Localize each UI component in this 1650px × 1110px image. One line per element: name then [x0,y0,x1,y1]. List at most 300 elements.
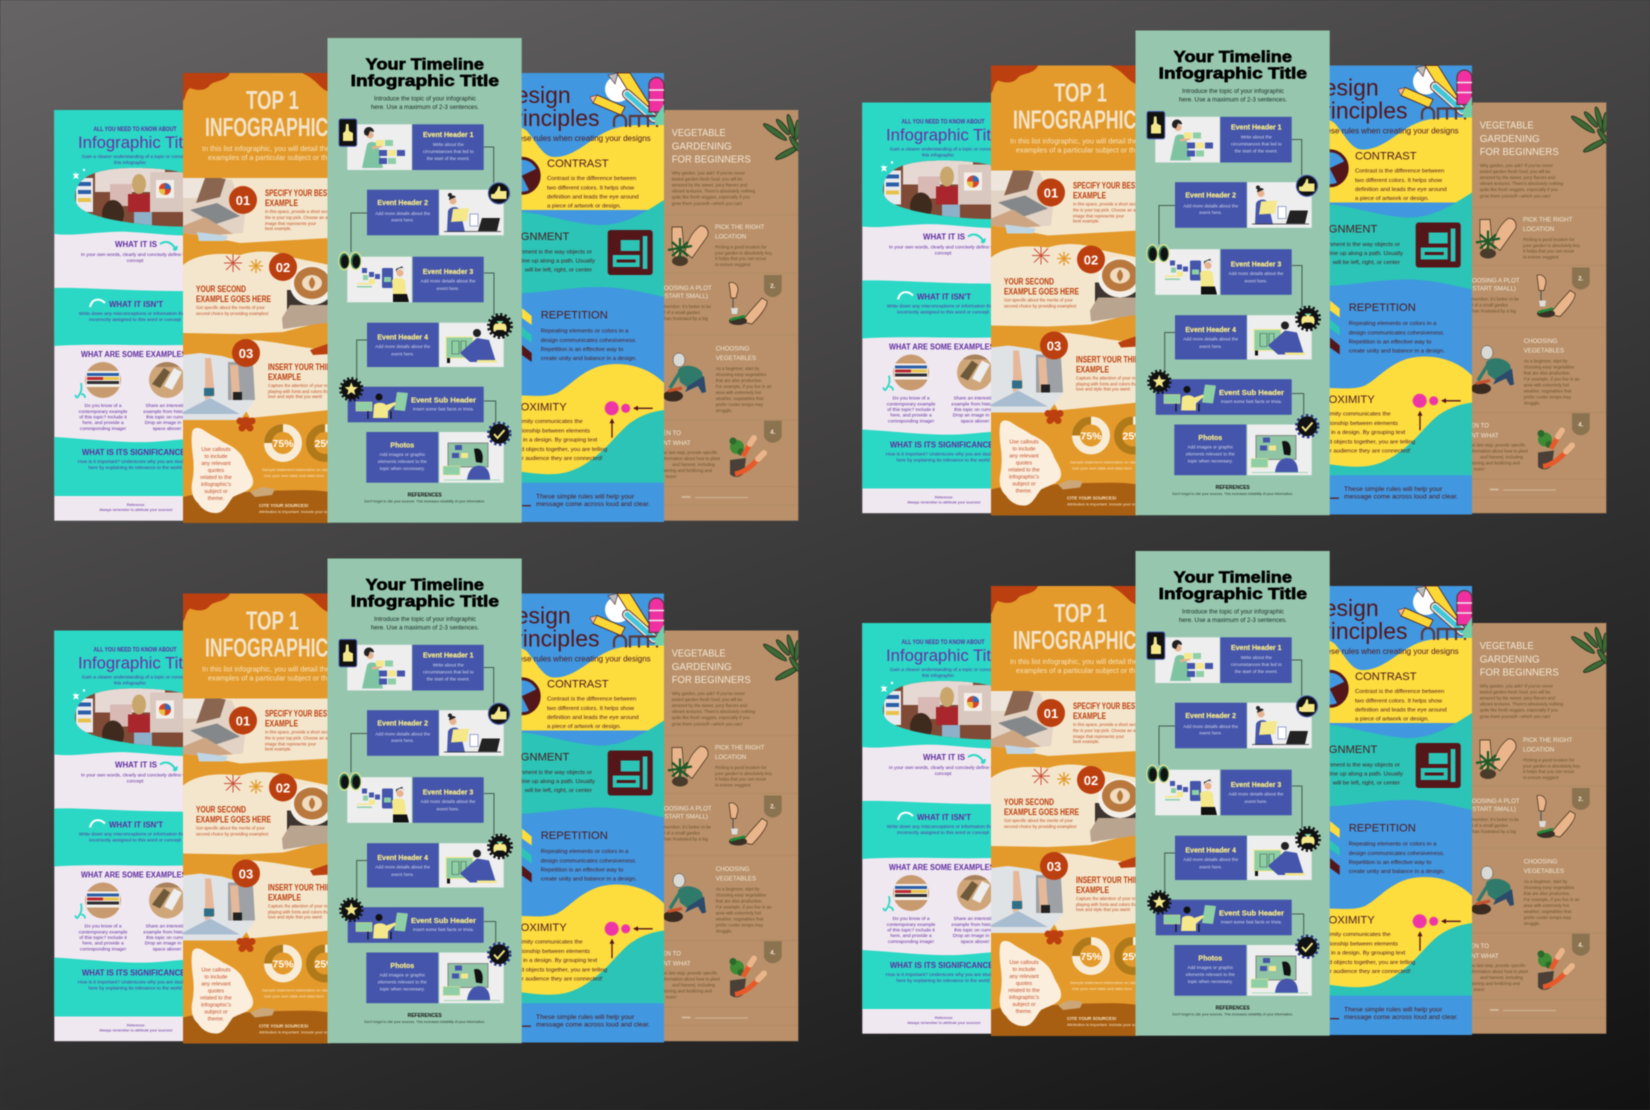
icon: star badge [1148,891,1170,913]
text block: significance [78,447,193,471]
text block: what it isn't: Write down any misconceptions or information that is [79,311,192,317]
event 4 [367,843,504,888]
illustration: trowel and hand [1537,795,1575,838]
text block: examples: space above! [153,426,181,432]
callout quote: to include [204,454,228,460]
text block: examples: space above! [961,418,989,424]
callout quote: any relevant [1009,974,1039,980]
text block: what it is: In your own words, clearly and concisely define the [889,244,997,250]
photos event: topic when necessary. [380,986,425,992]
icon: repetition chevrons [1330,821,1340,875]
heading: timeline title: Introduce the topic of your infographic [374,616,476,623]
illustration: gloved hands with plant [1538,950,1572,990]
text block: what it isn't: incorrectly assigned to this word or concept [897,830,990,836]
section: second example: YOUR SECOND [1004,276,1054,288]
event 1: the start of the event. [1235,669,1278,674]
text block: step 2: CHOOSING A PLOT [1463,798,1520,805]
event 1: circumstances that led to [423,670,474,674]
event 3 [347,777,484,823]
event 1 [347,124,484,170]
heading: teal title: Infographic Title [886,647,1004,665]
event sub header [1156,379,1292,415]
text block: what it isn't: incorrectly assigned to this word or concept [89,838,182,844]
text block: step 3: area with extremely hot [716,910,762,916]
icon: proximity dots and arrows [1413,914,1461,951]
event 2: Add more details about the [1183,204,1239,208]
panel: orange list infographic [991,66,1161,516]
references: Reference: [127,1024,145,1028]
text block: step 3: prefer cooler temps may [716,922,764,928]
text block: step 3: prefer cooler temps may [1524,915,1572,920]
heading: teal title: Gain a clearer understanding of a topic or concept [82,154,189,160]
heading: gardening title: VEGETABLE [1480,640,1534,652]
text block: examples: this topic on current [146,414,189,420]
text block: step 2: (START SMALL) [662,814,708,820]
text block: step 3: prefer cooler temps may [716,402,764,407]
references [907,1016,981,1025]
callout quote: subject or [1012,482,1036,488]
section: first example: SPECIFY YOUR BEST [265,708,331,720]
text block: step 1: your garden is absolutely key. [1523,763,1581,768]
text block: step 2: (START SMALL) [1470,806,1516,813]
text block: step 4: PLANT WHAT [1459,432,1499,440]
text block: intro [1480,683,1564,719]
section: first example: EXAMPLE [1073,190,1106,202]
references [364,493,485,504]
text block: step 3: that are also productive. [716,898,763,904]
text block: contrast: two different colors. It helps show [547,185,635,191]
text block: intro: tasted garden-fresh food, you will be [1480,169,1551,174]
infographic set: bottom right [862,551,1610,1036]
section: third example: love and style that you want! [1076,907,1130,912]
text block: proximity: Proximity communicates the [509,940,583,946]
heading: orange title: INFOGRAPHICS [1013,104,1148,134]
heading: orange title [202,85,348,162]
heading: teal title: ALL YOU NEED TO KNOW ABOUT [902,640,985,646]
photos event: elements relevant to the [378,980,427,984]
heading: timeline title [1159,49,1307,104]
cite sources [1067,1016,1156,1027]
section: third example: 03 [1047,338,1061,354]
section: first example: In this space, provide a short section on [1073,202,1149,206]
text block: step 1: PICK THE RIGHT [1523,737,1573,744]
text block: step 1: LOCATION [1523,226,1554,233]
heading: timeline title: here. Use a maximum of 2-3 sentences. [371,104,479,111]
text block: contrast: CONTRAST [547,158,609,170]
text block: step 4: WHEN TO [1460,943,1489,950]
donut chart stats [1070,951,1146,991]
text block: proximity: in a design. By grouping text [523,958,598,964]
text block: step 1: Picking a good location for [715,244,767,249]
text block: repetition [541,309,637,362]
section: third example: INSERT YOUR THIRD [268,362,336,373]
text block: examples [79,349,191,432]
text block: step 2: than frustrated by a big [1471,308,1517,314]
section: first example: In this space, provide a short section on [1073,722,1149,727]
text block: alignment [1312,744,1403,787]
text block: contrast: a piece of artwork or design. [547,724,621,730]
event sub header: Event Sub Header [1219,911,1284,918]
section: first example: image that represents your [265,742,317,746]
donut chart stats: Use your own stats and data here. [1072,986,1133,991]
event sub header: Event Sub Header [1219,390,1284,397]
text block: step 4: information about how to plant [1469,448,1529,454]
text block: what it isn't [887,812,1000,836]
section: second example [1004,246,1105,308]
event 4: Add more details about the [1183,336,1239,342]
badge: step 4 [1572,413,1590,435]
footer url [682,494,748,499]
callout quote [200,968,232,1022]
text block: repetition: Repeating elements or colors in a [1349,321,1437,327]
text block: proximity: your audience they are connected! [512,456,603,462]
event 4: Add more details about the [375,344,431,349]
text block: examples [79,870,191,952]
closing note: message come across loud and clear. [1344,494,1458,500]
text block: intro: Why garden, you ask? If you've never [1480,683,1554,688]
illustration: gloved hands with plant [730,958,764,997]
icon: leaves [762,114,802,162]
text block: repetition: create unity and balance in a design. [1349,348,1445,354]
text block: proximity: Proximity communicates the [509,419,583,425]
heading: teal title: this infographic [114,680,147,686]
references: Reference: [935,1016,953,1020]
footer url [682,1014,748,1020]
heading: gardening title [672,127,751,166]
heading: orange title: TOP 1 [1054,78,1107,108]
illustration: kneeling gardener [1471,866,1514,914]
references [1172,1006,1293,1017]
section: second example: EXAMPLE GOES HERE [196,294,271,305]
text block: step 4: PLANT WHAT [651,440,691,447]
text block: repetition: Repeating elements or colors in a [1349,842,1437,848]
badge: step 2 [764,275,782,297]
text block: step 2: CHOOSING A PLOT [1463,278,1520,284]
illustration: hands with seedling [668,226,708,266]
photos event: Photos [1198,955,1222,962]
text block: step 3: As a beginner, start by [716,366,760,371]
text block: step 1: to ensure veggies! [715,262,751,267]
event 2 [1175,703,1312,748]
icon: eyes [338,772,362,791]
text block: examples: WHAT ARE SOME EXAMPLES? [889,862,999,872]
text block: alignment: line up along a path. Usually [1329,771,1403,777]
text block: what it is [889,232,997,256]
heading: timeline title: Infographic Title [351,73,499,90]
text block: step 4: and harvest, including [672,982,716,988]
text block: examples: this topic on current [954,928,997,934]
text block: intro: vibrant textures. There's absolutely nothing [1480,701,1564,706]
text block: what it isn't: WHAT IT ISN'T [109,820,164,830]
heading: timeline title: Your Timeline [1174,569,1292,586]
section: second example: Get specific about the merits of your [196,826,265,830]
badge: step 2: 2. [1578,276,1584,282]
section: first example: best example. [265,746,292,752]
heading: gardening title: FOR BEGINNERS [1480,667,1559,679]
text block: alignment: will be left, right, or center [1332,781,1400,787]
icon: burst figure [488,314,512,338]
text block: step 3 [1524,338,1580,406]
heading: timeline title: here. Use a maximum of 2-3 sentences. [371,624,479,632]
section: third example [232,860,345,920]
text block: step 3: As a beginner, start by [1524,358,1568,364]
text block: intro: grow them yourself—which you can! [1480,194,1550,198]
heading: teal title: this infographic [922,673,955,679]
heading: orange title: In this list infographic, you will detail the top 5 [1010,136,1156,146]
text block: step 4: more! [1473,466,1485,472]
heading: gardening title [672,648,751,686]
text block: intro: tasted garden-fresh food, you will be [672,697,743,702]
heading: teal title: this infographic [922,152,955,158]
panel: tan gardening infographic [1459,102,1610,513]
cite sources: CITE YOUR SOURCES! [1067,1016,1117,1021]
event 1: the start of the event. [1235,148,1278,154]
icon: contrast circle [504,158,539,193]
text block: step 4: information about how to plant [1469,969,1529,974]
icon: proximity dots and arrows [605,922,653,958]
heading: orange title: examples of a particular subject or theme. [208,153,343,162]
text block: step 3: area with extremely hot [716,390,762,395]
text block: examples: contemporary example [79,409,128,415]
event 4: event here. [1199,864,1222,870]
text block: step 4 [651,950,721,1000]
photos event: elements relevant to the [1186,452,1235,456]
icon: proximity dots and arrows [605,401,653,438]
event 3 [1155,249,1292,295]
illustration: gloved hands with plant [730,438,764,477]
icon: leaves [1570,627,1610,675]
heading: orange title: TOP 1 [246,606,299,636]
donut chart stats [262,438,338,478]
text block: what it isn't: Write down any misconceptions or information that is [887,824,1000,830]
text block: examples: corresponding image! [80,946,126,952]
text block: what it is: WHAT IT IS [115,760,157,770]
text block: contrast: Contrast is the difference between [547,176,636,182]
closing note [1330,1006,1458,1021]
text block: step 2 [1462,278,1520,314]
heading: timeline title [351,56,499,111]
callout quote: infographic's [1009,995,1039,1001]
text block: step 3: CHOOSING [1524,859,1558,866]
infographic set: top right [862,30,1610,516]
closing note [522,1014,650,1028]
section: second example: 02 [1084,773,1098,788]
icon: burst figure [1296,307,1320,330]
text block: step 1 [1523,737,1581,780]
references: REFERENCES [1216,485,1250,491]
event 4: Event Header 4 [1185,327,1236,334]
section: third example: Capture the attention of your readers by [268,904,345,908]
heading: orange title: TOP 1 [246,85,299,115]
heading: orange title: In this list infographic, you will detail the top 5 [202,664,348,674]
heading: timeline title: Introduce the topic of your infographic [1182,609,1284,616]
text block: step 3 [716,346,772,413]
section: second example: 02 [276,780,290,796]
text block: step 2: Remember: it's better to be [658,824,712,830]
text block: significance: here by explaining its relevance to the world [896,978,990,984]
text block: step 3: VEGETABLES [1524,348,1564,354]
text block: significance [886,960,1001,984]
references: Don't forget to cite your sources. This increases reliability of your information. [364,1020,485,1024]
event 1 [1155,637,1292,683]
text block: proximity: and objects together, you are telling [514,968,607,974]
badge: step 4 [764,941,782,963]
text block: repetition: design communicates cohesiveness. [1349,330,1445,336]
text block: alignment: ALIGNMENT [1312,744,1377,756]
photos event [366,952,504,1003]
section: second example: second choice by providing examples! [196,832,269,836]
heading: orange title: examples of a particular subject or theme. [1016,666,1151,675]
text block: alignment: Alignment is the way objects or [1319,242,1400,248]
cite sources [1067,496,1156,506]
text block: repetition: create unity and balance in a design. [541,876,637,882]
text block: repetition: design communicates cohesiveness. [541,338,637,344]
illustration: pencils and swatches [590,594,664,648]
section: second example: YOUR SECOND [196,804,246,816]
callout quote: any relevant [201,982,231,988]
callout quote: theme. [1016,1009,1032,1015]
text block: proximity: and objects together, you are telling [1322,960,1415,966]
footer url: www. [682,494,691,499]
text block: proximity: PROXIMITY [1313,394,1375,406]
section: second example: Get specific about the merits of your [196,305,265,310]
event 1: Write about the [433,662,464,668]
text block: significance: here by explaining its relevance to the world [88,986,182,992]
donut chart stats: Sample statement elaboration on stat here [262,467,338,472]
illustration: trowel and hand [729,282,767,325]
heading: timeline title: Your Timeline [366,577,484,594]
text block: step 1: It helps that you can scout [1523,248,1575,254]
heading: timeline title: Your Timeline [366,56,484,73]
text block: repetition: Repetition is an effective way to [1349,860,1432,866]
text block: step 2: than frustrated by a big [663,316,709,321]
icon: repetition chevrons [1330,300,1340,354]
event 2 [367,710,504,756]
section: first example: the is your top pick. Choose an accurate [1073,208,1150,212]
text block: step 1 [1523,216,1581,260]
text block: step 3: struggle. [716,408,733,413]
callout quote: infographic's [201,482,231,488]
heading: timeline title: here. Use a maximum of 2-3 sentences. [1179,617,1287,624]
event 1: circumstances that led to [1231,142,1282,146]
text block: examples: Drop an image in the [145,940,190,946]
text block: intro: amazed by the sweet, juicy flavors and [1480,695,1556,700]
section: first example: image that represents your [1073,214,1125,218]
icon: leaves [1570,106,1610,154]
closing note: These simple rules will help your [1344,1006,1443,1013]
text block: repetition: design communicates cohesiveness. [541,858,637,864]
cite sources [259,1024,348,1034]
text block: step 1: It helps that you can scout [1523,769,1575,774]
callout quote: quotes [1016,460,1032,466]
text block: alignment: Alignment is the way objects or [511,770,592,776]
text block: intro: quite like fresh veggies, especially if you [1480,187,1558,192]
text block: proximity: in a design. By grouping text [523,438,598,444]
icon: leaves [762,634,802,682]
badge: step 2: 2. [1578,797,1584,803]
text block: step 3: weather, vegetables that [716,396,764,401]
heading: orange title: INFOGRAPHICS [205,632,340,662]
text block: contrast: Contrast is the difference between [547,696,636,702]
references: Don't forget to cite your sources. This increases reliability of your information. [364,500,485,504]
section: first example: the is your top pick. Choose an accurate [265,215,342,220]
section: first example: SPECIFY YOUR BEST [1073,701,1139,712]
heading: design principles: Design [1307,595,1379,621]
text block: significance: WHAT IS ITS SIGNIFICANCE? [890,440,998,450]
text block: step 1: to ensure veggies! [715,782,751,788]
event 1: Event Header 1 [1231,124,1282,132]
references [1172,485,1293,496]
text block: step 3: weather, vegetables that [1524,909,1572,914]
icon: eyes [338,252,362,270]
text block: what it is [81,239,189,264]
panel: mint timeline infographic [1136,551,1330,1036]
closing note: message come across loud and clear. [1344,1014,1458,1021]
icon: raised finger [1147,632,1165,659]
text block: repetition: Repetition is an effective way to [541,347,624,353]
text block: step 3: CHOOSING [716,866,750,873]
donut chart stats: Use your own stats and data here. [264,994,325,998]
text block: examples: Drop an image in the [953,933,998,939]
text block: step 2: Remember: it's better to be [1466,296,1520,302]
text block: proximity: and objects together, you are telling [1322,440,1415,446]
text block: step 2: (START SMALL) [662,293,708,300]
panel: blue design principles infographic [1303,66,1472,514]
text block: alignment: line up along a path. Usually [1329,251,1403,257]
heading: gardening title: FOR BEGINNERS [672,674,751,686]
section: second example: YOUR SECOND [196,284,246,295]
text block: what it isn't [79,299,192,323]
heading: timeline title: here. Use a maximum of 2-3 sentences. [1179,96,1287,104]
heading: teal title: Gain a clearer understanding of a topic or concept [890,146,997,152]
event sub header [348,907,484,943]
text block: step 3: struggle. [1524,921,1541,926]
callout quote: to include [204,974,228,980]
section: second example: EXAMPLE GOES HERE [1004,286,1079,298]
event 1: circumstances that led to [423,149,474,154]
text block: significance [886,440,1001,464]
event 2: event here. [391,738,414,743]
closing note: message come across loud and clear. [536,1022,650,1028]
section: third example [1040,332,1153,392]
callout quote [1008,960,1040,1015]
closing note [1330,486,1458,500]
event 4: Event Header 4 [377,334,428,341]
text block: step 4: watering and fertilizing and [660,988,713,994]
icon: raised finger [339,640,357,667]
closing note: These simple rules will help your [536,1014,635,1021]
text block: step 4: For the last step, provide specific [654,450,718,455]
heading: gardening title: VEGETABLE [672,648,726,660]
photos event [1174,945,1312,996]
icon: contrast circle [1312,671,1347,706]
icon: thumbs up [1296,696,1318,717]
photos event [366,432,504,483]
cite sources: Attribution is important. Include your sources here [259,509,348,514]
text block: step 1: LOCATION [715,754,746,761]
callout quote: any relevant [201,461,231,467]
text block: step 3: weather, vegetables that [1524,388,1572,394]
heading: design principles: Design [499,602,571,628]
event 1: Event Header 1 [423,132,474,139]
section: second example [196,774,297,836]
text block: significance: WHAT IS ITS SIGNIFICANCE? [82,968,190,978]
callout quote: quotes [208,468,224,474]
text block: alignment: Alignment is the way objects or [511,249,592,255]
text block: intro: Why garden, you ask? If you've never [672,691,746,696]
text block: step 1: Picking a good location for [1523,757,1575,762]
event 1: Event Header 1 [423,652,474,660]
